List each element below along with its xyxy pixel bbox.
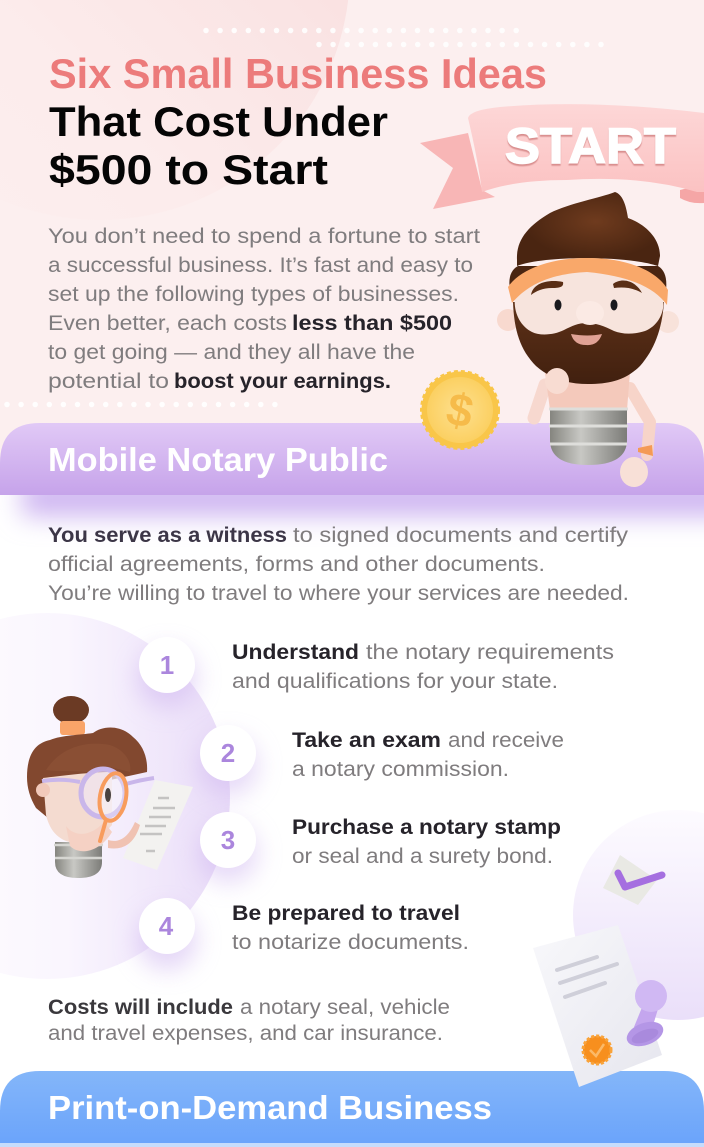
intro text: potential to (48, 370, 169, 393)
title: Six Small Business Ideas (49, 50, 547, 97)
panel: mobile notary header glow (22, 480, 704, 516)
step 2 (200, 725, 564, 781)
step 3: Purchase a notary stamp (292, 816, 561, 839)
costs note (48, 996, 450, 1045)
icon: gold coin: $ (442, 382, 478, 438)
illustration: bearded lightbulb man (497, 192, 679, 487)
costs note: and travel expenses, and car insurance. (48, 1022, 443, 1045)
title: $500 to Start (49, 146, 328, 193)
ears (497, 309, 519, 331)
beard (513, 302, 664, 384)
intro paragraph: mobile notary: official agreements, forms and other documents. (48, 553, 545, 576)
step 2: a notary commission. (292, 758, 509, 781)
title (49, 50, 547, 193)
glasses (42, 778, 154, 784)
mouth (571, 334, 602, 345)
face (43, 772, 112, 843)
costs note: Costs will include (48, 996, 233, 1019)
decorative dot rows (7, 30, 615, 404)
lower fist (620, 457, 648, 487)
step 4: Be prepared to travel (232, 902, 460, 925)
right arm (630, 388, 650, 455)
intro text: You don’t need to spend a fortune to start (48, 225, 480, 248)
step 1: and qualifications for your state. (232, 670, 558, 693)
intro text: less than $500 (292, 312, 452, 335)
step 2: and receive (448, 729, 564, 752)
eyes (554, 300, 562, 310)
bulb base (54, 842, 103, 878)
step 3: 3 (221, 825, 235, 855)
step 1: 1 (160, 650, 174, 680)
watch (638, 445, 653, 456)
intro text: boost your earnings. (174, 370, 391, 393)
ear (36, 783, 50, 797)
panel: intro background (0, 0, 704, 495)
headband (508, 258, 668, 305)
side hair (509, 266, 666, 290)
step 1: Understand (232, 641, 359, 664)
eye (105, 788, 111, 802)
step 2: Take an exam (292, 729, 441, 752)
intro text: to get going — and they all have the (48, 341, 415, 364)
heading band: Print-on-Demand Business: Print-on-Demand Business (48, 1089, 492, 1126)
costs note: a notary seal, vehicle (240, 996, 450, 1019)
step 4: to notarize documents. (232, 931, 469, 954)
intro paragraph: mobile notary (48, 524, 629, 605)
icon: document with seal and stamp (533, 925, 667, 1087)
intro text: set up the following types of businesses. (48, 283, 459, 306)
decorative circle: left (0, 613, 258, 979)
intro text: Even better, each costs (48, 312, 287, 335)
icon: gold coin (422, 372, 498, 448)
face mask (515, 262, 663, 334)
step 2: 2 (221, 738, 235, 768)
hair band (60, 721, 85, 735)
arms (66, 822, 112, 851)
step 4: 4 (159, 911, 174, 941)
bulb base (549, 408, 628, 465)
step 1 (139, 637, 614, 693)
intro text: a successful business. It’s fast and easy to (48, 254, 473, 277)
step 3: or seal and a surety bond. (292, 845, 553, 868)
hair (517, 192, 660, 266)
step 4 (139, 898, 469, 954)
body (545, 372, 630, 410)
step 1: the notary requirements (366, 641, 614, 664)
brows (531, 281, 563, 295)
heading band: Mobile Notary Public: Mobile Notary Public (48, 441, 388, 478)
icon: check mark card (603, 855, 662, 905)
heading band: Mobile Notary Public (0, 423, 704, 495)
nose (576, 301, 604, 325)
icon: start ribbon (420, 104, 704, 209)
paper (123, 780, 193, 870)
intro paragraph: mobile notary: You serve as a witness (48, 524, 287, 547)
decorative circle: right (573, 810, 704, 1020)
left arm (534, 385, 545, 418)
title: That Cost Under (49, 98, 388, 145)
icon: start ribbon: START (505, 118, 676, 174)
intro paragraph: mobile notary: You’re willing to travel to where your services are needed. (48, 582, 629, 605)
magnifier (96, 771, 130, 823)
intro paragraph: mobile notary: to signed documents and certify (293, 524, 629, 547)
hair back (27, 727, 147, 818)
step 3 (200, 812, 561, 868)
heading band: Print-on-Demand Business (0, 1071, 704, 1147)
illustration: woman with magnifying glass (27, 696, 193, 878)
fringe (46, 744, 130, 773)
bun (53, 696, 89, 724)
fist (545, 368, 569, 394)
intro text (48, 225, 480, 393)
